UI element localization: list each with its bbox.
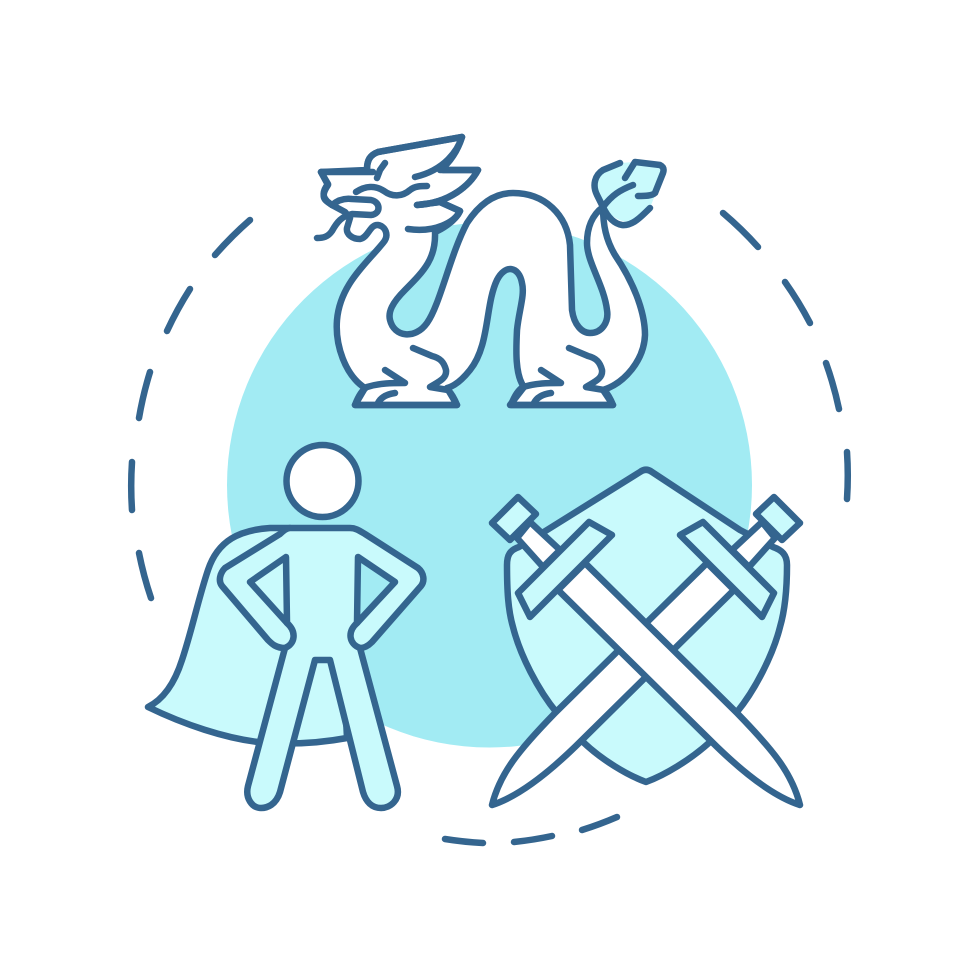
shield [507,470,787,782]
shield and swords [492,470,800,805]
background circle [227,222,752,748]
cape [148,528,347,743]
sword right [492,497,800,805]
dragon feet [355,348,457,405]
hands [285,623,360,648]
dashed ring [131,213,848,843]
dragon body [321,137,645,405]
hero body [220,528,423,808]
dragon [317,137,664,405]
dragon tail fin [595,162,663,222]
dragon head details [321,137,478,230]
inner arm gaps [250,557,287,623]
head [286,445,358,517]
sword left [492,497,800,805]
hero [148,445,423,808]
dragon tail details [595,162,664,225]
